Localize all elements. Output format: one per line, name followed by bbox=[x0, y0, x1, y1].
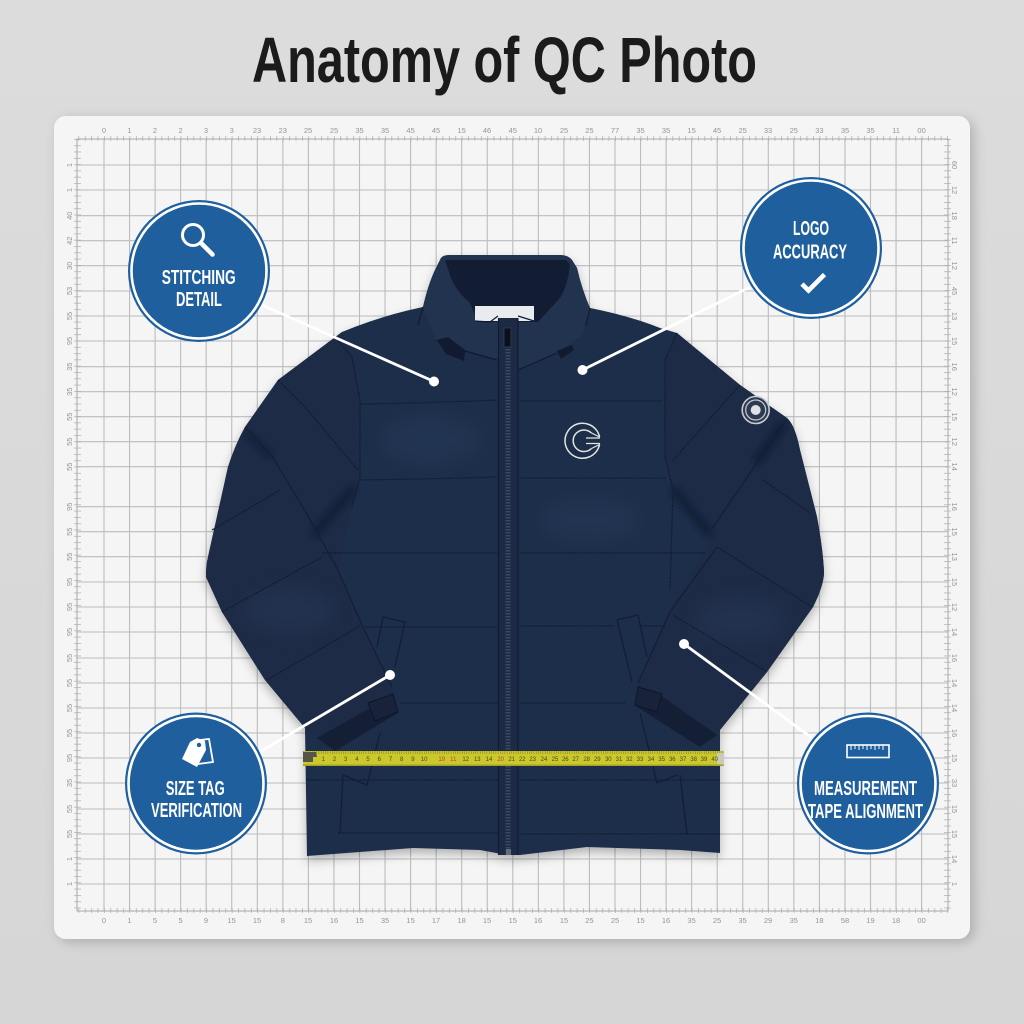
grid labels: bottom scale: 18 bbox=[815, 916, 824, 925]
measuring tape: 19 bbox=[438, 757, 446, 763]
grid labels: top scale: 2 bbox=[153, 126, 157, 135]
grid labels: top scale: 25 bbox=[739, 126, 747, 135]
callout: logo accuracy bbox=[740, 177, 882, 319]
callout: size tag verification: VERIFICATION bbox=[151, 799, 242, 822]
jacket bbox=[206, 255, 824, 856]
measuring tape bbox=[303, 751, 724, 766]
measuring tape: 13 bbox=[474, 757, 481, 763]
grid labels: bottom scale: 25 bbox=[713, 916, 721, 925]
icon: magnifying glass bbox=[182, 224, 212, 254]
grid labels: top scale: 00 bbox=[917, 126, 926, 135]
measuring tape: 28 bbox=[583, 757, 591, 763]
callout: size tag verification: SIZE TAG bbox=[166, 777, 225, 800]
grid labels: left scale: 55 bbox=[65, 312, 74, 320]
measuring tape: 29 bbox=[594, 757, 601, 763]
measuring tape: 12 bbox=[462, 757, 470, 763]
grid labels: bottom scale: 35 bbox=[790, 916, 798, 925]
grid labels: right scale: 14 bbox=[950, 855, 959, 863]
measuring tape: 26 bbox=[562, 757, 569, 763]
grid labels: bottom scale: 15 bbox=[636, 916, 645, 925]
jacket silhouette bbox=[206, 255, 824, 856]
grid labels: left scale: 1 bbox=[65, 163, 74, 167]
grid labels: bottom scale: 16 bbox=[330, 916, 338, 925]
measuring tape: 10 bbox=[421, 757, 428, 763]
measuring tape: 31 bbox=[616, 757, 623, 763]
callout: measurement tape alignment: TAPE ALIGNMENT bbox=[808, 800, 923, 823]
connector: measurement tape alignment bbox=[679, 639, 812, 738]
grid labels: right scale: 15 bbox=[950, 578, 959, 586]
grid labels: top scale: 25 bbox=[790, 126, 798, 135]
grid labels: top scale: 33 bbox=[764, 126, 772, 135]
grid labels: top scale: 77 bbox=[611, 126, 619, 135]
measuring tape: 32 bbox=[626, 757, 633, 763]
grid labels: right scale: 11 bbox=[950, 237, 959, 245]
measuring tape: 5 bbox=[366, 757, 370, 763]
grid labels: right scale: 33 bbox=[950, 779, 959, 787]
measuring tape: 3 bbox=[344, 757, 348, 763]
grid labels: bottom scale: 18 bbox=[892, 916, 900, 925]
sleeve badge bbox=[742, 396, 769, 424]
measuring tape: 34 bbox=[648, 757, 655, 763]
measuring tape: 38 bbox=[690, 757, 698, 763]
grid labels: top scale: 35 bbox=[381, 126, 389, 135]
grid labels: bottom scale: 17 bbox=[432, 916, 440, 925]
grid labels: left scale: 53 bbox=[65, 287, 74, 295]
grid labels: right scale: 13 bbox=[950, 553, 959, 561]
measuring tape: 9 bbox=[411, 757, 415, 763]
grid labels: right scale: 12 bbox=[950, 388, 959, 396]
grid labels: right scale: 15 bbox=[950, 830, 959, 838]
grid labels: right scale: 16 bbox=[950, 654, 959, 662]
connector: stitching detail bbox=[262, 305, 439, 386]
grid labels: bottom scale: 25 bbox=[585, 916, 594, 925]
grid labels: right scale: 1 bbox=[950, 882, 959, 886]
connector: logo accuracy bbox=[578, 287, 750, 375]
grid labels: right scale: 18 bbox=[950, 212, 959, 220]
grid labels: top scale: 1 bbox=[127, 126, 132, 135]
measuring tape: 7 bbox=[389, 757, 393, 763]
grid labels: bottom scale: 35 bbox=[687, 916, 696, 925]
callout: size tag verification bbox=[125, 712, 267, 854]
grid labels: right scale: 15 bbox=[950, 413, 959, 421]
grid labels: left scale: 35 bbox=[65, 779, 74, 787]
grid labels: bottom scale: 18 bbox=[458, 916, 466, 925]
grid labels: right scale: 60 bbox=[950, 161, 959, 169]
grid labels: left scale: 95 bbox=[65, 503, 74, 511]
grid labels: left scale: 1 bbox=[65, 882, 74, 886]
connector: size tag verification bbox=[258, 670, 395, 753]
grid labels: bottom scale: 58 bbox=[841, 916, 849, 925]
grid labels: bottom scale: 16 bbox=[662, 916, 670, 925]
measuring tape: 25 bbox=[552, 757, 559, 763]
callout: logo accuracy: LOGO bbox=[793, 217, 829, 240]
grid labels: bottom scale: 1 bbox=[127, 916, 132, 925]
grid labels: bottom scale: 35 bbox=[381, 916, 389, 925]
grid labels: right scale: 15 bbox=[950, 528, 959, 536]
armpit dark folds bbox=[248, 426, 782, 532]
measuring tape: 4 bbox=[355, 757, 359, 763]
callout: stitching detail: STITCHING bbox=[162, 266, 236, 289]
measuring tape: 14 bbox=[486, 757, 493, 763]
soft highlights bbox=[245, 415, 785, 642]
grid labels: top scale: 11 bbox=[892, 126, 900, 135]
grid labels: bottom scale: 15 bbox=[253, 916, 261, 925]
icon: check mark bbox=[802, 274, 824, 290]
grid labels: top scale: 45 bbox=[432, 126, 440, 135]
grid labels: right scale: 16 bbox=[950, 729, 959, 737]
grid labels: right scale: 12 bbox=[950, 186, 959, 194]
grid labels: left scale: 95 bbox=[65, 603, 74, 611]
zipper bbox=[498, 318, 518, 855]
collar bbox=[418, 255, 590, 370]
grid labels: left scale: 55 bbox=[65, 704, 74, 712]
grid labels: top scale: 0 bbox=[102, 126, 106, 135]
pockets bbox=[340, 615, 687, 834]
grid labels: left scale: 40 bbox=[65, 212, 74, 220]
grid labels: bottom scale: 29 bbox=[764, 916, 772, 925]
grid labels: left scale: 35 bbox=[65, 363, 74, 371]
grid labels: top scale: 25 bbox=[330, 126, 338, 135]
grid labels: right scale: 13 bbox=[950, 312, 959, 320]
grid labels: top scale: 15 bbox=[458, 126, 466, 135]
grid labels: left scale: 30 bbox=[65, 262, 74, 270]
title: Anatomy of QC Photo bbox=[252, 24, 757, 96]
grid labels: bottom scale: 15 bbox=[304, 916, 312, 925]
grid labels: top scale: 35 bbox=[866, 126, 875, 135]
grid labels: left scale: 55 bbox=[65, 528, 74, 536]
grid labels: right scale: 15 bbox=[950, 754, 959, 762]
measuring tape: 11 bbox=[450, 757, 457, 763]
grid labels: top scale: 35 bbox=[636, 126, 645, 135]
grid labels: bottom scale: 9 bbox=[204, 916, 208, 925]
grid labels: left scale: 55 bbox=[65, 413, 74, 421]
grid labels: right scale: 45 bbox=[950, 287, 959, 295]
grid labels: right scale: 15 bbox=[950, 337, 959, 345]
grid labels: right scale: 12 bbox=[950, 603, 959, 611]
grid labels: bottom scale: 19 bbox=[866, 916, 875, 925]
grid labels: left scale: 55 bbox=[65, 438, 74, 446]
measuring tape: 40 bbox=[711, 757, 719, 763]
grid labels: top scale: 3 bbox=[204, 126, 208, 135]
measuring tape: 33 bbox=[637, 757, 644, 763]
grid labels: bottom scale: 15 bbox=[355, 916, 364, 925]
grid labels: top scale: 35 bbox=[355, 126, 364, 135]
grid labels: right scale: 14 bbox=[950, 679, 959, 687]
grid labels: left scale: 55 bbox=[65, 729, 74, 737]
grid labels: bottom scale: 5 bbox=[179, 916, 183, 925]
callout: measurement tape alignment bbox=[797, 712, 939, 854]
grid labels: top scale: 45 bbox=[509, 126, 517, 135]
measuring tape: 22 bbox=[519, 757, 526, 763]
grid labels: bottom scale: 15 bbox=[509, 916, 517, 925]
grid labels: top scale: 25 bbox=[304, 126, 312, 135]
measuring tape: 23 bbox=[529, 757, 537, 763]
grid labels: left scale: 35 bbox=[65, 388, 74, 396]
grid labels: bottom scale: 00 bbox=[917, 916, 926, 925]
grid labels: bottom scale: 15 bbox=[483, 916, 491, 925]
measuring tape: 36 bbox=[669, 757, 676, 763]
measuring tape: 30 bbox=[605, 757, 612, 763]
measuring tape: 35 bbox=[658, 757, 666, 763]
grid labels: right scale: 12 bbox=[950, 262, 959, 270]
grid labels: bottom scale: 16 bbox=[534, 916, 542, 925]
grid labels: top scale: 35 bbox=[841, 126, 849, 135]
grid labels: top scale: 15 bbox=[687, 126, 696, 135]
right velcro cuff bbox=[635, 687, 717, 747]
measuring tape: 2 bbox=[333, 757, 337, 763]
grid labels: bottom scale bbox=[102, 916, 926, 925]
sleeve inner edges bbox=[245, 420, 786, 687]
grid labels: top scale: 10 bbox=[534, 126, 542, 135]
grid labels: top scale: 23 bbox=[279, 126, 287, 135]
measuring tape: 8 bbox=[400, 757, 404, 763]
measuring tape: 21 bbox=[508, 757, 516, 763]
grid labels: right scale: 14 bbox=[950, 704, 959, 712]
icon: price tags bbox=[182, 738, 213, 767]
grid labels: bottom scale: 8 bbox=[281, 916, 285, 925]
grid labels: left scale: 95 bbox=[65, 337, 74, 345]
grid labels: top scale: 35 bbox=[662, 126, 670, 135]
left sleeve shading bbox=[206, 332, 397, 751]
grid labels: bottom scale: 15 bbox=[560, 916, 568, 925]
quilting seams bbox=[212, 333, 812, 834]
grid labels: top scale: 3 bbox=[230, 126, 234, 135]
grid labels: top scale: 33 bbox=[815, 126, 824, 135]
grid labels: left scale: 42 bbox=[65, 237, 74, 245]
grid labels: left scale: 55 bbox=[65, 805, 74, 813]
left velcro cuff bbox=[317, 694, 398, 751]
grid labels: top scale: 2 bbox=[179, 126, 183, 135]
right sleeve shading bbox=[635, 333, 824, 747]
grid labels: right scale: 16 bbox=[950, 503, 959, 511]
measuring tape: 20 bbox=[497, 757, 505, 763]
grid labels: top scale: 23 bbox=[253, 126, 261, 135]
measuring tape: 37 bbox=[680, 757, 687, 763]
grid labels: top scale: 45 bbox=[713, 126, 721, 135]
grid labels: bottom scale: 25 bbox=[611, 916, 619, 925]
grid labels: left scale bbox=[65, 163, 74, 886]
grid labels: bottom scale: 15 bbox=[406, 916, 415, 925]
grid labels: right scale: 12 bbox=[950, 438, 959, 446]
grid labels: left scale: 55 bbox=[65, 830, 74, 838]
grid labels: left scale: 95 bbox=[65, 754, 74, 762]
grid labels: left scale: 55 bbox=[65, 679, 74, 687]
measuring tape: 6 bbox=[378, 757, 382, 763]
grid labels: bottom scale: 35 bbox=[739, 916, 747, 925]
grid labels: top scale: 25 bbox=[560, 126, 568, 135]
measuring tape: 1 bbox=[322, 757, 326, 763]
icon: ruler bbox=[847, 745, 889, 758]
grid labels: left scale: 55 bbox=[65, 463, 74, 471]
grid labels: right scale: 15 bbox=[950, 805, 959, 813]
grid labels: right scale bbox=[950, 161, 959, 886]
callout: stitching detail bbox=[128, 200, 270, 342]
panel: measuring grid board bbox=[54, 116, 970, 939]
callout: measurement tape alignment: MEASUREMENT bbox=[814, 777, 917, 800]
grid labels: left scale: 95 bbox=[65, 628, 74, 636]
grid labels: top scale: 46 bbox=[483, 126, 491, 135]
measuring tape: 27 bbox=[572, 757, 580, 763]
measuring tape: 39 bbox=[701, 757, 708, 763]
grid labels: bottom scale: 15 bbox=[228, 916, 236, 925]
grid labels: bottom scale: 0 bbox=[102, 916, 106, 925]
grid labels: right scale: 14 bbox=[950, 463, 959, 471]
measuring tape: 24 bbox=[541, 757, 548, 763]
grid labels: top scale: 25 bbox=[585, 126, 594, 135]
grid labels: left scale: 55 bbox=[65, 553, 74, 561]
grid labels: top scale: 45 bbox=[406, 126, 415, 135]
grid labels: left scale: 1 bbox=[65, 857, 74, 861]
grid labels: bottom scale: 5 bbox=[153, 916, 157, 925]
grid labels: left scale: 1 bbox=[65, 188, 74, 192]
grid labels: right scale: 16 bbox=[950, 363, 959, 371]
grid labels: top scale bbox=[102, 126, 926, 135]
grid labels: right scale: 14 bbox=[950, 628, 959, 636]
callout: stitching detail: DETAIL bbox=[176, 288, 222, 311]
callout: logo accuracy: ACCURACY bbox=[773, 240, 847, 264]
grid labels: left scale: 95 bbox=[65, 578, 74, 586]
chest logo bbox=[565, 423, 600, 458]
grid labels: left scale: 55 bbox=[65, 654, 74, 662]
